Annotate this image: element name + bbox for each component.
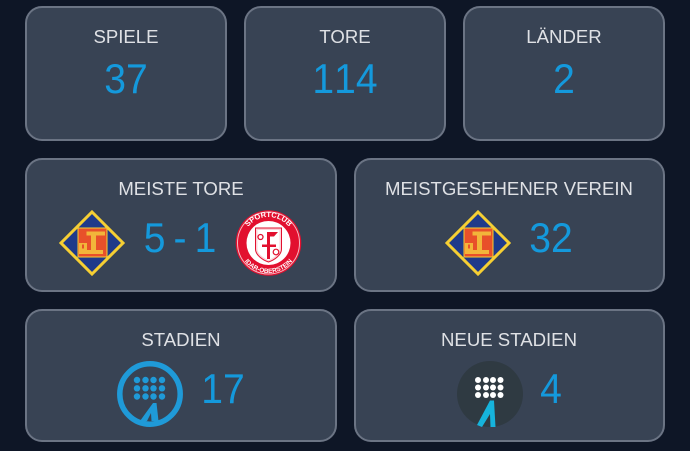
score: 5 - 1 — [144, 214, 216, 261]
heading: Spiele: SPIELE — [93, 26, 159, 47]
heading: Meiste Tore: MEISTE TORE — [118, 178, 244, 199]
heading: Tore: TORE — [319, 26, 371, 47]
heading: Meistgesehener Verein: MEISTGESEHENER VEREIN — [385, 178, 633, 199]
panel: Spiele — [25, 6, 227, 141]
icon: new stadium — [457, 361, 523, 427]
panel: Länder — [463, 6, 665, 141]
panel: Neue Stadien — [354, 309, 665, 442]
icon: TuS crest right — [445, 210, 511, 276]
panel: Meistgesehener Verein — [354, 158, 665, 292]
number: Spiele: 37 — [104, 55, 148, 102]
icon: TuS crest left — [59, 210, 125, 276]
icon: SC Idar-Oberstein crest — [236, 210, 302, 276]
number: Neue Stadien: 4 — [540, 365, 562, 412]
icon: SC Idar-Oberstein crest: IDAR-OBERSTEIN — [245, 258, 292, 274]
heading: Neue Stadien: NEUE STADIEN — [441, 329, 577, 350]
number: Meistgesehener Verein: 32 — [529, 214, 573, 261]
panel: Meiste Tore — [25, 158, 337, 292]
number: Länder: 2 — [553, 55, 575, 102]
heading: Länder: LÄNDER — [526, 26, 602, 47]
number: Tore: 114 — [312, 55, 378, 102]
icon: SC Idar-Oberstein crest: SPORTCLUB — [245, 212, 292, 226]
number: Stadien: 17 — [201, 365, 245, 412]
icon: stadium ring — [117, 361, 183, 427]
panel: Stadien — [25, 309, 337, 442]
panel: Tore — [244, 6, 446, 141]
heading: Stadien: STADIEN — [141, 329, 221, 350]
